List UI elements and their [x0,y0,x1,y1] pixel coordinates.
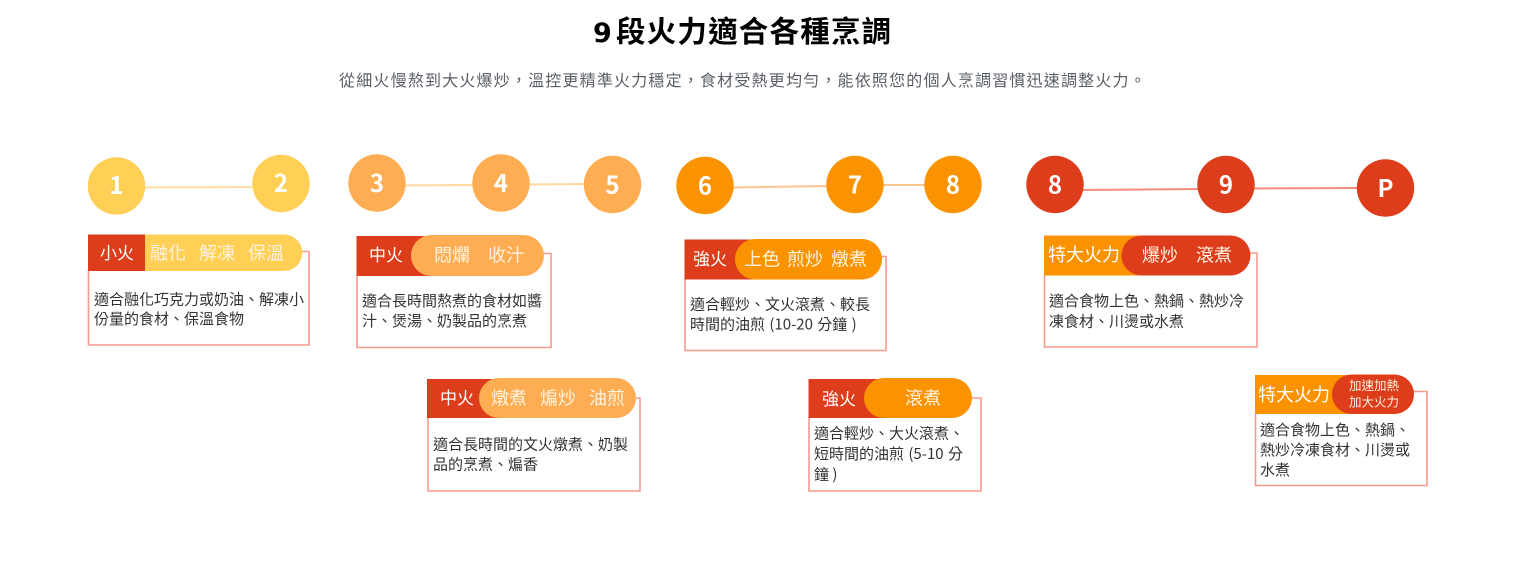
panel: high heat, boil: 短時間的油煎 (5-10 分 [814,443,963,464]
heat levels 8-P: 9 [1219,166,1233,200]
heat levels 1-2: 2 [274,164,288,199]
panel: high heat, boil: 強火 [822,385,856,410]
panel: medium heat, braise [356,235,551,348]
panel: extra high heat: 特大火力 [1048,241,1120,267]
heat levels 6-8: 7 [848,166,862,200]
heat levels 6-8 [676,156,982,214]
panel: low heat: 適合融化巧克力或奶油、解凍小 [94,288,304,310]
panel: P boost: 熱炒冷凍食材、川燙或 [1260,439,1410,460]
panel: medium heat, stew: 適合長時間的文火燉煮、奶製 [433,434,628,454]
panel: medium heat, braise: 悶爛 [434,242,470,268]
panel: high heat, sear: 上色 [744,246,780,272]
panel: P boost: 適合食物上色、熱鍋、 [1260,419,1410,440]
panel: P boost: 加大火力 [1349,392,1399,410]
panel: high heat, sear: 時間的油煎 (10-20 分鐘 ) [690,314,857,334]
panel: medium heat, braise: 適合長時間熬煮的食材如醬 [362,290,542,311]
panel: extra high heat: 爆炒 [1142,242,1178,268]
panel: extra high heat: 凍食材、川燙或水煮 [1049,310,1184,332]
panel: extra high heat [1044,236,1257,347]
panel: medium heat, braise: 汁、煲湯、奶製品的烹煮 [362,310,527,331]
panel: medium heat, stew: 油煎 [589,384,625,410]
title: 段火力適合各種烹調 [616,9,892,51]
panel: high heat, boil: 滾煮 [905,384,941,410]
panel: extra high heat: 適合食物上色、熱鍋、熱炒冷 [1049,290,1244,311]
panel: low heat: 小火 [100,239,134,264]
panel: P boost: 特大火力 [1258,381,1330,407]
heat levels 6-8: 6 [698,166,712,202]
heat levels 3-5: 4 [494,164,508,199]
panel: low heat: 份量的食材、保溫食物 [94,308,244,329]
heat levels 8-P: P [1377,169,1394,204]
panel: P boost: 水煮 [1260,459,1290,480]
panel: high heat, boil: 適合輕炒、大火滾煮、 [814,422,964,444]
panel: P boost: 加速加熱 [1349,375,1400,394]
panel: P boost [1255,374,1427,486]
heat levels 1-2 [88,155,310,215]
heat levels 3-5 [348,154,641,213]
heat levels 6-8: 8 [946,166,960,200]
panel: medium heat, stew: 中火 [440,384,474,409]
panel: low heat: 融化 [150,240,186,266]
panel: extra high heat: 滾煮 [1196,242,1232,268]
subtitle: 從細火慢熬到大火爆炒，溫控更精準火力穩定，食材受熱更均勻，能依照您的個人烹調習慣迅速調整火力。 [339,67,1147,91]
heat levels 3-5: 5 [605,166,620,200]
panel: high heat, sear [684,239,886,350]
panel: medium heat, braise: 收汁 [488,242,524,268]
panel: high heat, sear: 燉煮 [831,246,867,272]
panel: medium heat, stew: 品的烹煮、煸香 [433,454,538,474]
panel: high heat, boil [808,378,981,491]
panel: high heat, boil: 鐘 ) [814,464,837,484]
heat levels 3-5: 3 [370,164,384,199]
panel: medium heat, stew: 煸炒 [540,384,576,410]
panel: medium heat, braise: 中火 [369,241,403,266]
panel: high heat, sear: 煎炒 [787,246,823,272]
heat levels 8-P: 8 [1048,166,1062,200]
heat levels 1-2: 1 [109,166,124,201]
panel: medium heat, stew [427,378,640,491]
panel: high heat, sear: 適合輕炒、文火滾煮、較長 [690,294,870,314]
panel: low heat: 解凍 [199,240,235,266]
panel: medium heat, stew: 燉煮 [491,384,527,410]
heat levels 8-P [1026,156,1414,217]
panel: low heat: 保溫 [248,240,284,266]
title: 9 [593,18,612,49]
panel: low heat [88,234,309,345]
panel: high heat, sear: 強火 [693,245,727,270]
